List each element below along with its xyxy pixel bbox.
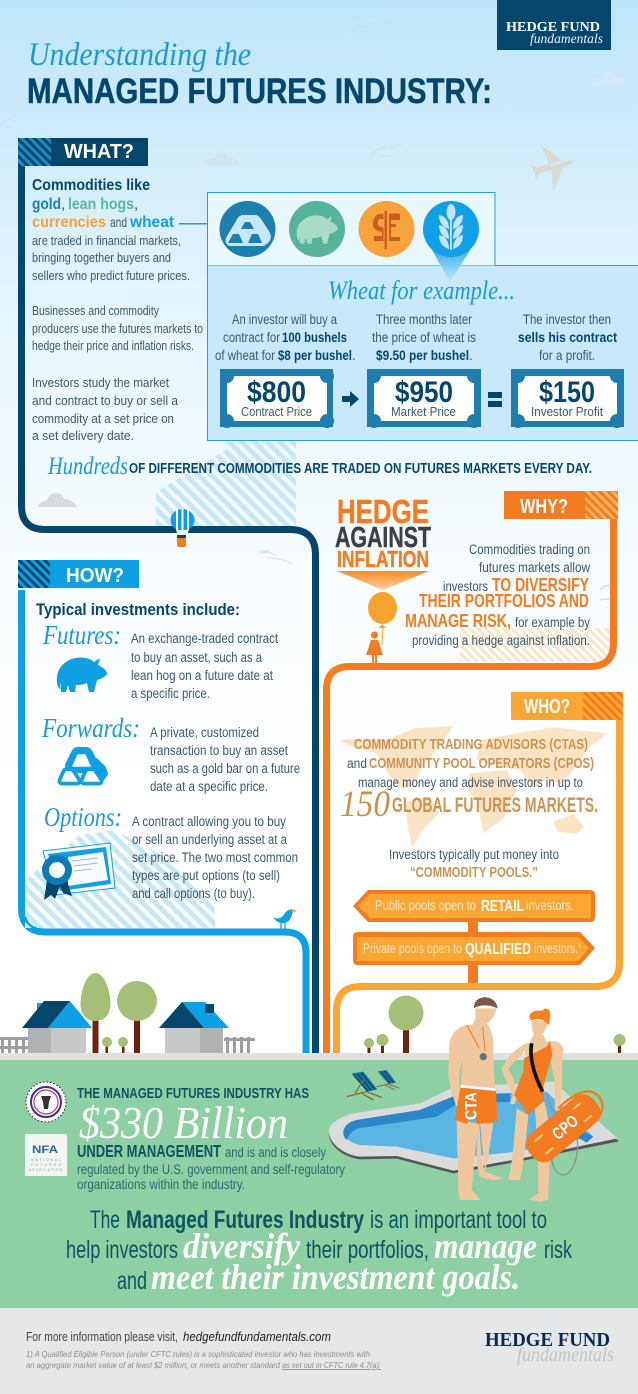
logo: footer: fundamentals bbox=[517, 1344, 614, 1366]
equals sign bbox=[488, 392, 502, 407]
futures description: a specific price. bbox=[131, 686, 210, 701]
text block: what: Investors study the market bbox=[32, 375, 169, 390]
step 1 text: 100 bushels bbox=[282, 330, 347, 345]
blue connector line bbox=[22, 590, 306, 1053]
icon: deck chairs bbox=[347, 1070, 399, 1100]
closing statement: diversify bbox=[183, 1226, 301, 1266]
text block: who bbox=[340, 736, 598, 881]
panel: commodities and example bbox=[208, 192, 638, 440]
icon: wheat bbox=[423, 201, 479, 282]
item: futures bbox=[42, 620, 278, 701]
text block: 330 billion: UNDER MANAGEMENT bbox=[77, 1141, 221, 1161]
step 3 text: for a profit. bbox=[539, 348, 595, 363]
text block: 330 billion bbox=[77, 1085, 345, 1192]
footer panel bbox=[0, 1308, 638, 1394]
text block: why: futures markets allow bbox=[479, 560, 590, 575]
figure: lifeguard CPO bbox=[502, 1009, 606, 1202]
text block: why: providing a hedge against inflation. bbox=[412, 633, 590, 648]
heading: WHAT? bbox=[18, 138, 148, 166]
hatched stripes behind why text bbox=[460, 628, 610, 662]
footer text: as set out in CFTC rule 4.7(a). bbox=[282, 1360, 381, 1370]
options description bbox=[132, 814, 298, 901]
text block: why: TO DIVERSIFY bbox=[492, 575, 589, 595]
icon: hog bbox=[57, 658, 107, 692]
figure: lifeguard CTA: CTA bbox=[462, 1092, 481, 1120]
text block: what: wheat bbox=[129, 214, 175, 231]
text block: 330 billion: organizations within the industry. bbox=[77, 1177, 245, 1192]
text block: who: 150 bbox=[340, 784, 390, 825]
icon: gold bars bbox=[62, 754, 106, 782]
futures description bbox=[131, 631, 278, 701]
text block: why: THEIR PORTFOLIOS AND bbox=[419, 591, 589, 611]
forwards description bbox=[150, 725, 300, 794]
connector from wheat to icons bbox=[179, 223, 208, 224]
logo: footer: HEDGE FUND bbox=[485, 1329, 610, 1351]
icon: certificate bbox=[42, 843, 115, 900]
closing statement: and bbox=[117, 1267, 147, 1295]
text block: what: are traded in financial markets, bbox=[32, 233, 181, 248]
heading: WHAT?: WHAT? bbox=[64, 141, 134, 163]
scene: fences bbox=[0, 1037, 255, 1053]
closing statement: meet their investment goals. bbox=[151, 1257, 520, 1297]
text block: who: and bbox=[347, 756, 367, 771]
text block: why: investors bbox=[443, 579, 488, 594]
logo: top: fundamentals bbox=[530, 32, 604, 47]
footer text: For more information please visit, bbox=[26, 1329, 178, 1344]
item: options bbox=[42, 802, 298, 901]
step 3 text: sells his contract bbox=[518, 330, 617, 345]
sign: public pools bbox=[353, 890, 595, 934]
heading: WHY?: WHY? bbox=[520, 496, 568, 518]
trees bbox=[80, 973, 626, 1053]
callout: hedge against inflation: INFLATION bbox=[337, 546, 429, 572]
step 2 text: the price of wheat is bbox=[372, 330, 476, 345]
sign: private pools: QUALIFIED bbox=[465, 941, 531, 958]
background sky bbox=[0, 0, 638, 1060]
text block: what: a set delivery date. bbox=[32, 428, 134, 443]
item: futures: Futures: bbox=[42, 620, 121, 650]
options description: or sell an underlying asset at a bbox=[132, 832, 287, 847]
icon: person with balloon bbox=[366, 592, 397, 663]
closing statement: Managed Futures Industry bbox=[126, 1206, 364, 1234]
callout: hedge against inflation: HEDGE bbox=[337, 493, 429, 530]
futures description: An exchange-traded contract bbox=[131, 631, 278, 646]
text block: 330 billion: and is and is closely bbox=[225, 1145, 326, 1160]
text block: what: , bbox=[61, 196, 65, 213]
text block: why: for example by bbox=[515, 615, 590, 630]
step 1 text: contract for bbox=[223, 330, 280, 345]
text block: what: lean hogs bbox=[68, 196, 134, 213]
text block: who: Investors typically put money into bbox=[389, 847, 559, 862]
step 2 text: . bbox=[469, 348, 473, 363]
heading: HOW?: HOW? bbox=[66, 565, 124, 587]
heading: HOW? bbox=[18, 560, 139, 588]
decorative clouds, birds and plane bbox=[0, 18, 626, 600]
closing statement: risk bbox=[544, 1236, 572, 1264]
callout: hundreds of commodities bbox=[47, 453, 592, 480]
text block: who: manage money and advise investors in up to bbox=[358, 775, 583, 790]
bill: investor profit bbox=[511, 369, 624, 428]
logo: NFA: FUTURES bbox=[31, 1163, 62, 1167]
sign: private pools: Private pools open to bbox=[363, 941, 462, 956]
house: left bbox=[22, 1001, 92, 1053]
title: MANAGED FUTURES INDUSTRY: bbox=[27, 72, 492, 111]
text block: what: Businesses and commodity bbox=[32, 303, 159, 318]
footer text bbox=[26, 1329, 381, 1370]
step 1 text: $8 per bushel bbox=[278, 348, 352, 363]
closing statement: is an important tool to bbox=[370, 1206, 547, 1234]
text block: what: , bbox=[134, 196, 138, 213]
heading: WHY? bbox=[504, 491, 618, 519]
bill: contract price bbox=[220, 369, 334, 428]
forwards description: such as a gold bar on a future bbox=[150, 761, 300, 776]
text block: what: and contract to buy or sell a bbox=[32, 393, 179, 408]
logo: top: HEDGE FUND bbox=[506, 20, 600, 35]
text block: what: bringing together buyers and bbox=[32, 250, 171, 265]
logo: NFA: ASSOCIATION bbox=[29, 1168, 63, 1172]
text block: what: producers use the futures markets to bbox=[32, 321, 203, 336]
seal bbox=[26, 1082, 66, 1122]
item: options: Options: bbox=[44, 802, 122, 832]
item: forwards bbox=[41, 713, 300, 794]
sign: public pools: investors. bbox=[526, 898, 574, 913]
closing statement: their portfolios, bbox=[306, 1236, 429, 1264]
item: forwards: Forwards: bbox=[41, 713, 140, 743]
icon: bird bbox=[273, 909, 297, 929]
bill: market price: $950 bbox=[395, 376, 453, 409]
closing statement bbox=[66, 1206, 572, 1297]
text block: 330 billion: $330 Billion bbox=[79, 1097, 288, 1148]
house: right bbox=[159, 1002, 229, 1053]
futures description: lean hog on a future date at bbox=[131, 668, 273, 683]
options description: set price. The two most common bbox=[132, 850, 298, 865]
icon: lean hog bbox=[289, 201, 345, 257]
step 2 text: Three months later bbox=[376, 312, 472, 327]
icon: gold bars bbox=[220, 201, 276, 257]
figure: lifeguard CPO: CPO bbox=[548, 1111, 582, 1144]
forwards description: A private, customized bbox=[150, 725, 259, 740]
text block: why: Commodities trading on bbox=[469, 542, 590, 557]
callout: hedge against inflation: AGAINST bbox=[335, 522, 431, 554]
footer text: 1) A Qualified Eligible Person (under CFTC rules) is a sophisticated investor who has investments with bbox=[26, 1349, 370, 1359]
bill: market price bbox=[367, 369, 481, 428]
figure: lifeguard CTA bbox=[448, 997, 503, 1200]
bill: investor profit: $150 bbox=[539, 376, 595, 409]
forwards description: transaction to buy an asset bbox=[150, 743, 288, 758]
text block: what: Commodities like bbox=[32, 177, 150, 194]
options description: and call options (to buy). bbox=[132, 886, 255, 901]
sign: public pools: Public pools open to bbox=[375, 898, 476, 913]
bill: market price: Market Price bbox=[391, 404, 456, 419]
callout: hedge against inflation bbox=[335, 493, 431, 590]
text block: 330 billion: THE MANAGED FUTURES INDUSTRY HAS bbox=[77, 1085, 309, 1102]
heading: WHO?: WHO? bbox=[524, 696, 570, 718]
text block: what: commodity at a set price on bbox=[32, 411, 174, 426]
text block: what: hedge their price and inflation risks. bbox=[32, 338, 194, 353]
step 3 text bbox=[518, 312, 617, 363]
logo: NFA bbox=[25, 1134, 67, 1176]
callout: hundreds of commodities: Hundreds bbox=[47, 453, 128, 480]
forwards description: date at a specific price. bbox=[150, 779, 268, 794]
text block: who: “COMMODITY POOLS.” bbox=[410, 865, 538, 881]
logo: top bbox=[497, 0, 611, 50]
step 1 text: . bbox=[352, 348, 356, 363]
text block: what: gold bbox=[32, 196, 61, 213]
title bbox=[27, 37, 492, 111]
text block: 330 billion: regulated by the U.S. government and self-regulatory bbox=[77, 1162, 345, 1177]
sign: private pools: 1 bbox=[578, 943, 582, 949]
text block: what: currencies bbox=[32, 214, 106, 231]
futures description: to buy an asset, such as a bbox=[131, 650, 262, 665]
footer text: an aggregate market value of at least $2 million, or meets another standard bbox=[26, 1360, 280, 1370]
title: Understanding the bbox=[28, 37, 251, 73]
text block: why bbox=[405, 542, 590, 648]
sign: private pools: investors. bbox=[534, 941, 578, 956]
text block: what bbox=[32, 177, 203, 443]
step 2 text: $9.50 per bushel bbox=[376, 348, 469, 363]
text block: why: MANAGE RISK, bbox=[405, 611, 511, 631]
bill: investor profit: Investor Profit bbox=[531, 404, 603, 419]
pale orange connector line bbox=[336, 720, 620, 1053]
icon: hot air balloon bbox=[170, 509, 194, 547]
sign: private pools bbox=[353, 932, 595, 983]
closing statement: The bbox=[90, 1206, 120, 1234]
heading: WHO? bbox=[511, 692, 623, 720]
closing statement: help investors bbox=[66, 1236, 178, 1264]
logo: NFA: NFA bbox=[32, 1144, 58, 1156]
step 2 text bbox=[372, 312, 476, 363]
sign: public pools: RETAIL bbox=[481, 898, 524, 915]
closing statement: manage bbox=[434, 1226, 537, 1266]
heading: wheat for example: Wheat for example... bbox=[328, 276, 515, 305]
options description: A contract allowing you to buy bbox=[132, 814, 286, 829]
step 1 text bbox=[215, 312, 356, 363]
logo: NFA: NATIONAL bbox=[31, 1158, 61, 1162]
options description: types are put options (to sell) bbox=[132, 868, 280, 883]
world map bbox=[338, 726, 607, 848]
text block: what: sellers who predict future prices. bbox=[32, 268, 190, 283]
ground and green lawn panel bbox=[0, 1053, 638, 1308]
footer text: hedgefundfundamentals.com bbox=[183, 1329, 331, 1344]
step 1 text: An investor will buy a bbox=[232, 312, 337, 327]
orange connector line bbox=[326, 519, 614, 1053]
illustration: pool bbox=[329, 1082, 619, 1173]
hatched stripes behind panel bbox=[156, 427, 296, 526]
text block: what: and bbox=[110, 214, 127, 230]
heading: typical investments: Typical investments include: bbox=[36, 601, 240, 619]
hatched stripes behind options bbox=[25, 830, 215, 928]
step 3 text: The investor then bbox=[523, 312, 611, 327]
step 1 text: of wheat for bbox=[215, 348, 275, 363]
arrow bbox=[342, 391, 359, 407]
navy connector line bbox=[22, 166, 316, 1053]
logo: footer bbox=[485, 1329, 614, 1366]
bill: contract price: $800 bbox=[247, 376, 306, 409]
icon: currencies bbox=[358, 201, 414, 257]
bill: contract price: Contract Price bbox=[241, 404, 312, 419]
